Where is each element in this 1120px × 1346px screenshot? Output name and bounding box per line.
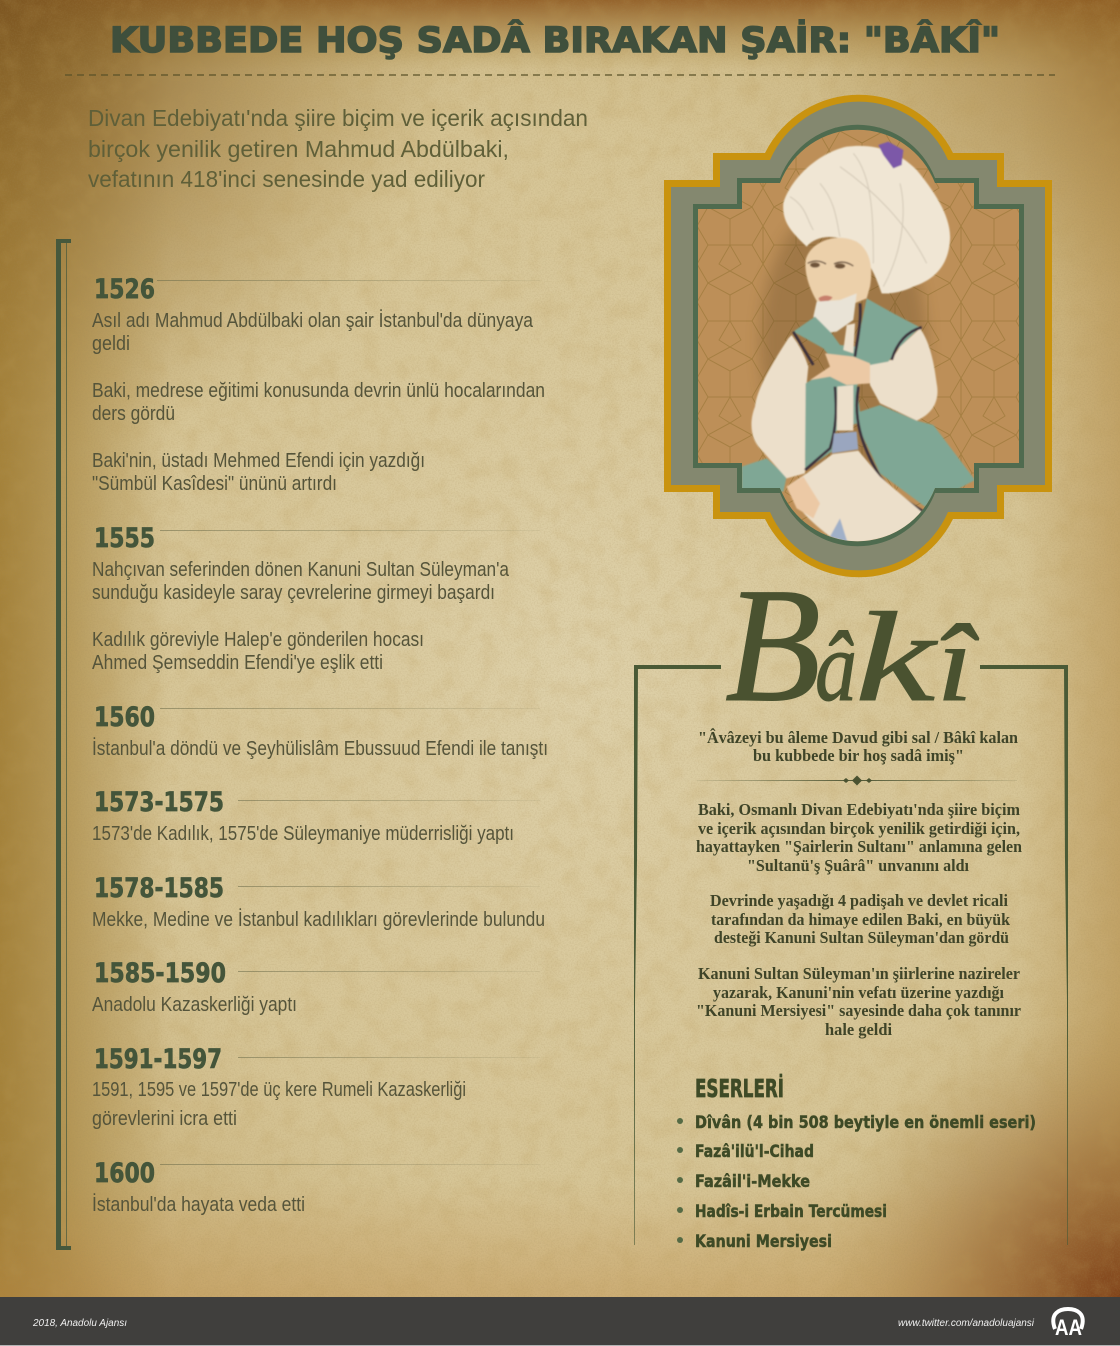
year 1585-1590 bbox=[92, 958, 540, 1016]
icon: Anadolu Agency logo bbox=[1053, 1309, 1083, 1340]
sash bbox=[832, 432, 858, 453]
year 1585-1590: 1585-1590 bbox=[94, 958, 226, 989]
name heading: î bbox=[937, 602, 979, 724]
intro text: vefatının 418'inci senesinde yad ediliyor bbox=[88, 166, 485, 192]
name heading: â bbox=[815, 611, 857, 722]
year 1555: Kadılık göreviyle Halep'e gönderilen hocası bbox=[92, 629, 424, 651]
panel: timeline bbox=[92, 274, 548, 1216]
works list bbox=[677, 1113, 1036, 1252]
quote: "Âvâzeyi bu âleme Davud gibi sal / Bâkî kalan bbox=[698, 728, 1019, 747]
sleeve left bbox=[751, 335, 808, 478]
intro text bbox=[88, 105, 588, 192]
year 1555: Ahmed Şemseddin Efendi'ye eşlik etti bbox=[92, 652, 383, 674]
year 1526: ders gördü bbox=[92, 403, 175, 425]
works list: Dîvân (4 bin 508 beytiyle en önemli eseri) bbox=[695, 1113, 1036, 1133]
works list: Kanuni Mersiyesi bbox=[695, 1232, 832, 1252]
quote bbox=[698, 728, 1019, 765]
biography text: Kanuni Sultan Süleyman'ın şiirlerine nazireler bbox=[698, 964, 1020, 983]
year 1591-1597: 1591-1597 bbox=[94, 1044, 222, 1075]
turban bbox=[783, 146, 950, 294]
year 1526 bbox=[92, 274, 545, 495]
portrait medallion bbox=[664, 95, 1052, 577]
year 1560 bbox=[92, 702, 548, 760]
year 1600: İstanbul'da hayata veda etti bbox=[92, 1193, 305, 1216]
biography text: ve içerik açısından birçok yenilik getirdiği için, bbox=[698, 819, 1020, 838]
sleeve right bbox=[870, 328, 937, 421]
portrait figure: poet Bâkî bbox=[742, 142, 975, 543]
year 1591-1597: görevlerini icra etti bbox=[92, 1108, 237, 1130]
year 1560: 1560 bbox=[94, 702, 155, 733]
footer credit: 2018, Anadolu Ajansı bbox=[32, 1318, 127, 1329]
name heading: B bbox=[725, 555, 821, 736]
year 1526: 1526 bbox=[94, 274, 155, 305]
year 1591-1597 bbox=[92, 1044, 540, 1130]
biography text bbox=[696, 800, 1022, 1039]
biography text: Devrinde yaşadığı 4 padişah ve devlet ricali bbox=[710, 891, 1008, 910]
year 1578-1585 bbox=[92, 873, 545, 931]
works list: Fazâil'i-Mekke bbox=[695, 1172, 810, 1192]
year 1526: Baki, medrese eğitimi konusunda devrin ünlü hocalarından bbox=[92, 380, 545, 402]
biography text: desteği Kanuni Sultan Süleyman'dan gördü bbox=[714, 928, 1009, 947]
year 1585-1590: Anadolu Kazaskerliği yaptı bbox=[92, 994, 297, 1016]
beard bbox=[813, 293, 857, 333]
year 1526: "Sümbül Kasîdesi" ününü artırdı bbox=[92, 473, 337, 495]
biography text: yazarak, Kanuni'nin vefatı üzerine yazdığı bbox=[713, 983, 1004, 1002]
year 1578-1585: 1578-1585 bbox=[94, 873, 224, 904]
face bbox=[805, 238, 871, 307]
works list: Hadîs-i Erbain Tercümesi bbox=[695, 1202, 887, 1222]
vest bbox=[793, 298, 975, 507]
year 1600 bbox=[92, 1158, 540, 1216]
year 1600: 1600 bbox=[94, 1158, 155, 1189]
biography text: hale geldi bbox=[825, 1020, 892, 1039]
quote: bu kubbede bir hoş sadâ imiş" bbox=[753, 746, 964, 765]
year 1560: İstanbul'a döndü ve Şeyhülislâm Ebussuud Efendi ile tanıştı bbox=[92, 737, 548, 760]
works list: Fazâ'ilü'l-Cihad bbox=[695, 1142, 814, 1162]
year 1555 bbox=[92, 523, 540, 674]
name heading: k bbox=[855, 586, 938, 728]
icon: Anadolu Agency logo: AA bbox=[1055, 1315, 1082, 1340]
turban folds bbox=[790, 153, 927, 287]
year 1526: Baki'nin, üstadı Mehmed Efendi için yazdığı bbox=[92, 450, 425, 472]
biography text: tarafından da himaye edilen Baki, en büyük bbox=[711, 910, 1011, 929]
year 1555: Nahçıvan seferinden dönen Kanuni Sultan Süleyman'a bbox=[92, 559, 510, 581]
year 1578-1585: Mekke, Medine ve İstanbul kadılıkları görevlerinde bulundu bbox=[92, 908, 545, 931]
biography text: hayattayken "Şairlerin Sultanı" anlamına gelen bbox=[696, 837, 1022, 856]
trousers bbox=[787, 451, 923, 543]
hands bbox=[810, 353, 870, 385]
biography text: "Sultanü'ş Şuârâ" unvanını aldı bbox=[747, 856, 969, 875]
year 1591-1597: 1591, 1595 ve 1597'de üç kere Rumeli Kazaskerliği bbox=[92, 1079, 466, 1101]
intro text: birçok yenilik getiren Mahmud Abdülbaki, bbox=[88, 136, 509, 162]
footer url: www.twitter.com/anadoluajansi bbox=[898, 1318, 1035, 1329]
year 1555: sunduğu kasideyle saray çevrelerine girmeyi başardı bbox=[92, 582, 495, 604]
cloak lower left bbox=[742, 458, 787, 492]
title: KUBBEDE HOŞ SADÂ BIRAKAN ŞAİR: "BÂKÎ" bbox=[110, 19, 1000, 61]
footer bar bbox=[0, 1297, 1120, 1346]
ornament divider bbox=[697, 776, 1017, 786]
shirt bbox=[837, 323, 855, 431]
year 1573-1575: 1573'de Kadılık, 1575'de Süleymaniye müderrisliği yaptı bbox=[92, 823, 514, 845]
year 1573-1575: 1573-1575 bbox=[94, 787, 224, 818]
timeline bracket bbox=[56, 239, 71, 1250]
intro text: Divan Edebiyatı'nda şiire biçim ve içerik açısından bbox=[88, 105, 588, 131]
turban ornament bbox=[878, 142, 903, 168]
biography text: "Kanuni Mersiyesi" sayesinde daha çok tanınır bbox=[696, 1001, 1021, 1020]
biography text: Baki, Osmanlı Divan Edebiyatı'nda şiire biçim bbox=[698, 800, 1020, 819]
year 1573-1575 bbox=[92, 787, 540, 845]
panel: biography frame bbox=[634, 555, 1068, 1252]
works heading: ESERLERİ bbox=[695, 1073, 784, 1103]
year 1526: Asıl adı Mahmud Abdülbaki olan şair İstanbul'da dünyaya bbox=[92, 309, 534, 332]
year 1526: geldi bbox=[92, 333, 130, 355]
year 1555: 1555 bbox=[94, 523, 155, 554]
vest dark trim bbox=[793, 303, 923, 512]
